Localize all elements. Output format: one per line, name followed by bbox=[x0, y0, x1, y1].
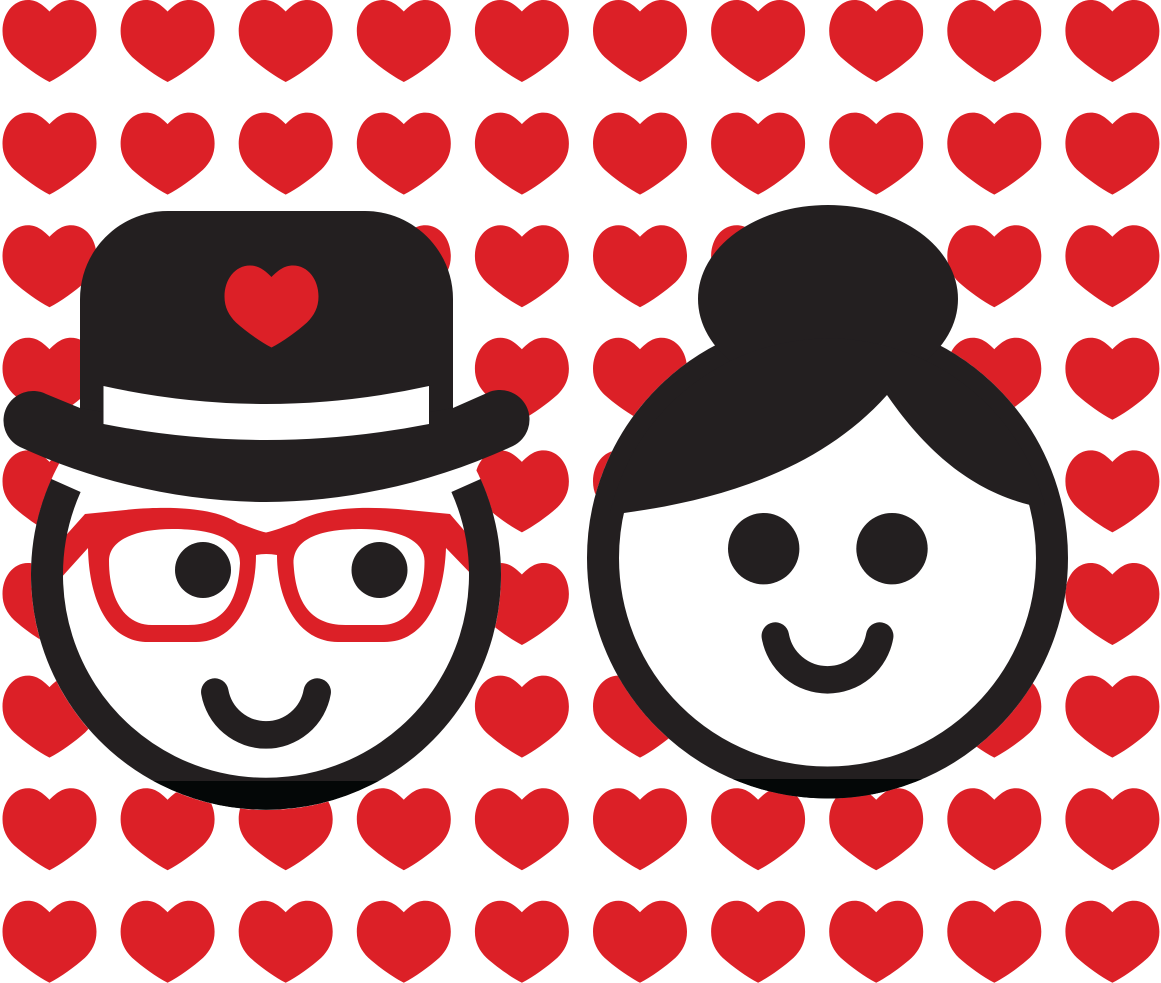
red glasses bbox=[60, 508, 474, 642]
hat brim bbox=[3, 390, 530, 502]
left eye bbox=[175, 542, 231, 598]
smile bbox=[775, 636, 880, 680]
hair fringe bbox=[610, 338, 1045, 513]
hat band bbox=[104, 386, 429, 440]
man character bbox=[3, 211, 530, 810]
right eye bbox=[856, 513, 928, 584]
woman character bbox=[587, 205, 1068, 798]
right eye bbox=[352, 542, 408, 598]
hair bun bbox=[698, 205, 958, 393]
icon: hat heart bbox=[224, 266, 318, 348]
left eye bbox=[728, 513, 799, 584]
hat bbox=[3, 211, 530, 502]
man face bbox=[31, 340, 501, 810]
woman head outline bbox=[603, 334, 1052, 782]
hat crown bbox=[80, 211, 453, 430]
smile bbox=[215, 692, 317, 735]
man head outline bbox=[47, 486, 485, 794]
woman face bbox=[587, 318, 1068, 798]
